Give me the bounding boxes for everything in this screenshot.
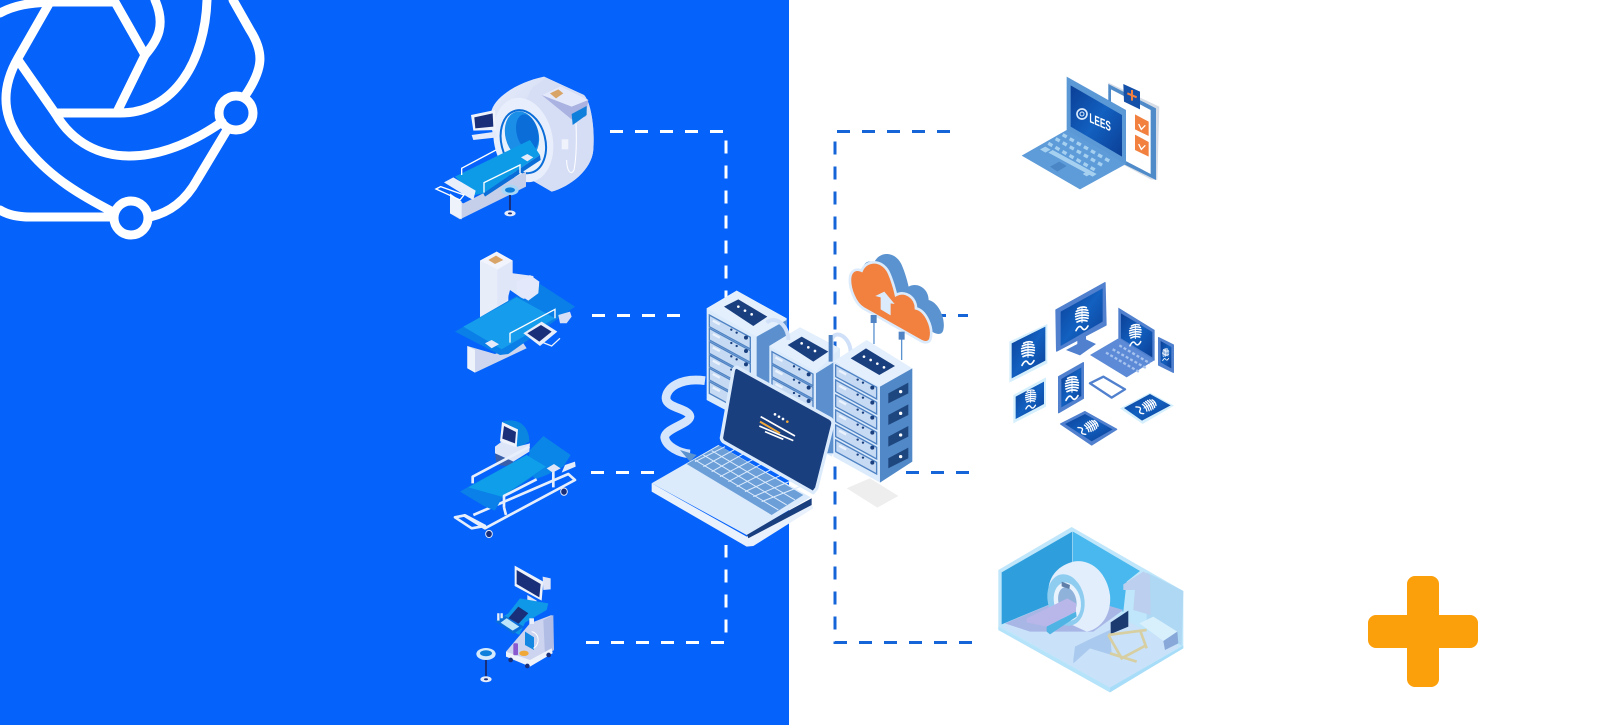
top dots rack 1 and 2 (737, 305, 816, 352)
tablet lower left (1013, 377, 1046, 423)
laptop (652, 367, 833, 547)
empty small tablet (1090, 377, 1125, 398)
cloud (850, 254, 944, 360)
server rack 3 (833, 340, 912, 483)
dashed connectors: right, server to outputs (835, 132, 976, 642)
icon: ultrasound machine (476, 566, 554, 682)
icon: MRI scanner (436, 77, 594, 219)
icon: X-ray table (455, 252, 575, 373)
tablet bottom (1061, 412, 1117, 445)
tablet lower right (1120, 393, 1174, 424)
server rack 2 (769, 327, 840, 457)
icon: orange plus (1368, 576, 1478, 687)
shadow tile (847, 478, 898, 508)
monitor (1056, 283, 1106, 355)
icon: server racks, laptop and cloud (652, 254, 944, 547)
cable (665, 380, 705, 454)
tablet upper left (1009, 324, 1047, 383)
icon: laptop with clipboard and LEES logo (1022, 77, 1159, 189)
icon: isometric MRI room (998, 527, 1183, 692)
icon: group of imaging devices (1009, 283, 1174, 445)
panel: blue background (0, 0, 789, 725)
connector loops (767, 320, 851, 360)
tablet centre (1059, 363, 1083, 413)
server rack 1 (707, 291, 787, 427)
logo on laptop screen: LEES (1089, 111, 1111, 135)
laptop (1090, 308, 1155, 377)
dashed connectors: left, scanners to server (586, 132, 726, 642)
logo: aperture network mark (0, 0, 260, 235)
phone (1159, 338, 1173, 372)
icon: stretcher with monitor (455, 420, 576, 538)
